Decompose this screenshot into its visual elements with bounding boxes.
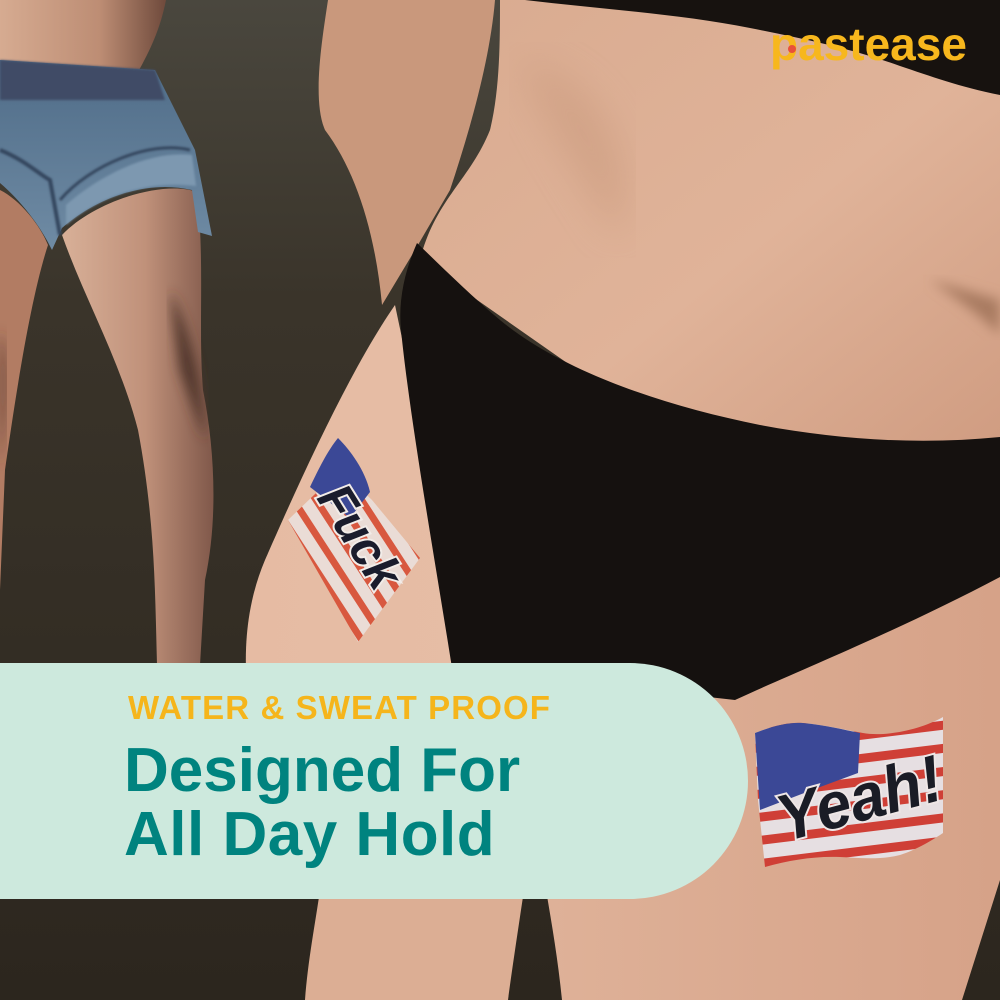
- heading: [124, 736, 520, 869]
- word: Fuck: [307, 474, 415, 601]
- torso: [0, 0, 166, 72]
- eyebrow: water and sweat proof: WATER & SWEAT PROOF: [128, 689, 551, 726]
- canton: [755, 723, 860, 810]
- heading: Designed For: [124, 736, 520, 805]
- logo leaf mark: [788, 45, 796, 53]
- left figure: [0, 0, 213, 665]
- word: Yeah!: [768, 741, 950, 856]
- black top: [525, 0, 1000, 95]
- torso: [420, 0, 1000, 470]
- heading: All Day Hold: [124, 800, 495, 869]
- stripes: [288, 470, 420, 642]
- canton: [310, 438, 370, 518]
- arm: [319, 0, 495, 305]
- flag sticker: Fuck: [288, 438, 420, 642]
- left lower leg: [305, 890, 524, 1000]
- denim shorts: [0, 60, 212, 250]
- logo: pastease: [770, 18, 967, 70]
- right figure: [246, 0, 1000, 1000]
- far leg: [0, 190, 48, 590]
- black bikini: [400, 243, 1000, 700]
- right thigh and lower leg: [460, 575, 1000, 1000]
- stripes: [755, 717, 943, 867]
- flag sticker: Yeah!: [755, 717, 950, 867]
- panel: headline: [0, 663, 748, 899]
- thigh and hip: [246, 305, 470, 670]
- near leg: [62, 189, 213, 665]
